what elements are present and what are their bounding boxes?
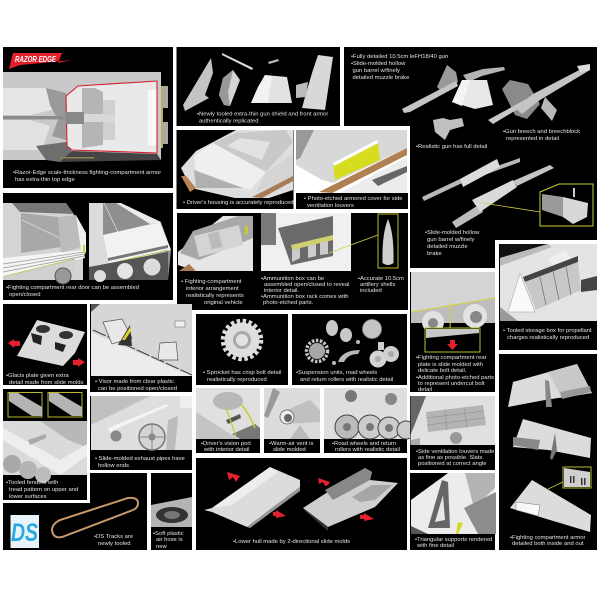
top view of hull	[3, 72, 168, 162]
text: gun features: gun barrel w/finely	[352, 68, 400, 74]
track loop	[52, 498, 138, 537]
interior image	[178, 216, 253, 271]
louvers image	[410, 396, 495, 445]
panel: road wheels	[324, 388, 415, 453]
caption: • Photo-etched armored cover for side	[304, 196, 403, 202]
caption: interior: interior arrangement	[186, 286, 239, 292]
caption: with interior detail	[203, 447, 249, 453]
caption	[416, 355, 494, 393]
caption: •Road wheels and return	[332, 441, 396, 447]
red arrows	[8, 339, 85, 367]
road wheels image	[324, 388, 415, 439]
red arrows	[227, 472, 374, 521]
yellow callout: muzzle detail	[483, 184, 593, 226]
panel: fighting compartment rear plate	[410, 272, 495, 393]
panel: visor	[90, 304, 192, 392]
gun mantlet	[433, 118, 464, 140]
rear plate image	[411, 272, 495, 333]
yellow inset	[425, 328, 480, 352]
panel: suspension	[292, 314, 407, 385]
caption: can be positioned open/closed	[98, 386, 177, 392]
suspension parts	[306, 320, 399, 368]
icon: DS logo	[10, 515, 39, 548]
air hose image	[151, 497, 192, 527]
text: gun features	[351, 54, 448, 81]
caption: with fine detail	[416, 543, 454, 549]
caption: •Driver's vision port	[201, 441, 251, 447]
rear door image left	[3, 203, 86, 284]
armor plate 1	[508, 364, 592, 407]
caption: •Triangular supports rendered	[415, 537, 492, 543]
yellow inset boxes	[8, 392, 82, 417]
yellow callout	[548, 467, 591, 489]
text: breech: •Gun breech and breechblock	[503, 129, 580, 135]
caption: detail	[418, 387, 432, 393]
armor plate 2	[513, 419, 591, 460]
hull exterior	[204, 467, 300, 528]
caption: has extra-thin top edge	[15, 177, 75, 183]
caption: shell: artillery shells	[360, 282, 395, 288]
caption: ammunition: •Ammunition box can be	[261, 276, 324, 282]
panel: gun shield parts	[176, 47, 340, 126]
text: gun features: •Slide-molded hollow	[351, 61, 406, 67]
text: barrel	[425, 230, 480, 257]
ammunition box image	[261, 213, 378, 271]
caption	[6, 480, 78, 500]
caption	[510, 535, 585, 547]
caption: ventilation louvers	[307, 203, 354, 209]
text: barrel: •Slide-molded hollow	[425, 230, 480, 236]
text: gun features: detailed muzzle brake	[352, 75, 409, 81]
panel: air hose	[151, 473, 192, 550]
caption: plate is slide molded with	[418, 362, 483, 368]
caption: • Visor made from clear plastic	[95, 379, 174, 385]
storage box image	[500, 244, 597, 321]
caption: ammunition: •Ammunition box rack comes with	[261, 294, 348, 300]
caption: ammunition: assembled open/closed to reveal	[264, 282, 349, 288]
caption	[197, 112, 328, 124]
caption: tread pattern on upper and	[9, 487, 78, 493]
panel: fenders	[3, 389, 87, 500]
exhaust image	[91, 396, 192, 450]
caption: •Additional photo-etched parts	[416, 375, 494, 381]
caption	[13, 170, 161, 183]
caption: slide molded	[273, 447, 306, 453]
caption: charges realistically reproduced	[507, 335, 589, 341]
caption: interior: original vehicle	[204, 300, 243, 306]
panel: interior and ammunition	[177, 213, 408, 310]
caption	[201, 441, 251, 453]
caption: as fine as possible. Slats	[418, 455, 482, 461]
caption: • Slide-molded exhaust pipes have	[95, 456, 185, 462]
text: breech: represented in detail	[506, 136, 559, 142]
caption: authentically replicated	[199, 118, 258, 124]
sprocket image	[223, 321, 261, 359]
caption: shell: included	[360, 288, 382, 294]
panel: razor edge top view	[3, 47, 173, 188]
caption: realistically reproduced	[207, 377, 267, 383]
caption	[203, 370, 281, 383]
caption	[94, 534, 133, 547]
caption: rollers with realistic detail	[335, 447, 400, 453]
caption	[6, 373, 83, 386]
callout: artillery shell	[378, 214, 398, 268]
caption: •Warm-air vent is	[269, 441, 313, 447]
caption: air hose is	[156, 537, 183, 543]
caption: •Suspension units, road wheels	[296, 370, 377, 376]
text: barrel: detailed muzzle	[427, 244, 468, 250]
caption: positioned at correct angle	[418, 461, 487, 467]
panel: exhaust pipes	[90, 396, 192, 470]
caption: •Tooled fenders with	[6, 480, 58, 486]
caption: •Side ventilation louvers made	[416, 449, 494, 455]
warm air vent image	[264, 388, 320, 439]
photo-etched cover image	[296, 130, 408, 193]
caption: • Driver's housing is accurately reproduced	[183, 200, 294, 206]
caption: •Fighting compartment armor	[510, 535, 585, 541]
caption: new	[156, 544, 168, 550]
caption: detailed both inside and out	[512, 541, 584, 547]
caption: ammunition: interior detail.	[264, 288, 299, 294]
gun barrels	[422, 158, 554, 228]
panel: photo-etched cover	[296, 130, 408, 209]
assembled gun with shield	[402, 65, 505, 113]
caption: •Soft plastic	[153, 531, 184, 537]
caption: interior	[181, 279, 244, 306]
caption	[332, 441, 400, 453]
caption: •Fighting compartment rear	[416, 355, 487, 361]
caption: to represent undercut bolt	[418, 381, 485, 387]
panel: rear door	[3, 193, 173, 300]
panel: sprocket	[196, 314, 288, 385]
caption: ammunition	[261, 276, 349, 306]
vision port image	[196, 388, 260, 439]
caption: •Fighting compartment rear door can be assembled	[6, 285, 139, 291]
caption: •Glacis plate given extra	[6, 373, 70, 379]
visor image	[91, 304, 192, 376]
panel: gun details	[344, 47, 597, 268]
panel: triangular supports	[410, 473, 496, 550]
caption: shell: •Accurate 10.5cm	[358, 276, 404, 282]
triangular supports image	[411, 473, 496, 534]
gun breech assembly	[488, 64, 590, 124]
caption	[296, 370, 393, 383]
panel: warm-air vent	[264, 388, 320, 453]
icon: razor edge logo: RAZOR EDGE	[15, 54, 56, 64]
caption: delicate bolt detail.	[418, 368, 467, 374]
caption: interior: • Fighting-compartment	[181, 279, 242, 285]
caption	[304, 196, 403, 209]
panel: glacis plate	[3, 304, 87, 386]
caption	[95, 379, 177, 392]
icon: DS logo: DS	[11, 519, 38, 547]
caption: •Razor-Edge scale-thickness fighting-compartment armor	[13, 170, 161, 176]
text: gun features: •Fully detailed 10.5cm leFH18/40 gun	[351, 54, 448, 60]
caption	[416, 449, 494, 467]
hull interior	[303, 468, 398, 531]
text: barrel: brake	[427, 251, 442, 257]
panel: side ventilation louvers	[410, 396, 495, 470]
text: breech	[503, 129, 580, 142]
caption: • Sprocket has crisp bolt detail	[203, 370, 281, 376]
caption: newly tooled	[98, 541, 130, 547]
caption: interior: realistically represents	[186, 293, 244, 299]
caption: and return rollers with realistic detail	[300, 377, 393, 383]
rear door image right	[89, 203, 171, 282]
fender image	[3, 421, 87, 483]
panel: lower hull	[196, 458, 407, 550]
caption: •DS Tracks are	[94, 534, 133, 540]
caption: •Newly tooled extra-thin gun shield and front armor	[197, 112, 328, 118]
caption: ammunition: photo-etched parts.	[263, 300, 314, 306]
caption: • Tooled storage box for propellant	[503, 328, 592, 334]
panel: fighting compartment armor	[499, 354, 597, 550]
text: realistic gun: •Realistic gun has full detail	[416, 144, 487, 150]
armor plate 3	[510, 480, 591, 532]
caption	[503, 328, 592, 341]
caption	[153, 531, 184, 550]
panel: driver's vision port	[196, 388, 260, 453]
panel: DS tracks	[3, 473, 147, 550]
caption	[415, 537, 492, 549]
icon: razor edge logo	[9, 53, 72, 69]
glacis image	[17, 320, 85, 366]
caption: hollow ends	[98, 463, 129, 469]
caption: open/closed	[9, 292, 41, 298]
gun shield pieces	[183, 53, 333, 111]
caption: lower surfaces	[9, 494, 47, 500]
caption: detail made from slide molds	[9, 380, 83, 386]
panel: storage box	[499, 244, 597, 350]
caption: •Lower hull made by 2-directional slide molds	[233, 539, 350, 545]
panel: driver's housing	[176, 130, 294, 209]
text: barrel: gun barrel w/finely	[427, 237, 475, 243]
caption	[95, 456, 185, 469]
driver's housing image	[181, 130, 293, 198]
caption	[6, 285, 139, 298]
caption	[269, 441, 313, 453]
caption: shell	[358, 276, 404, 294]
